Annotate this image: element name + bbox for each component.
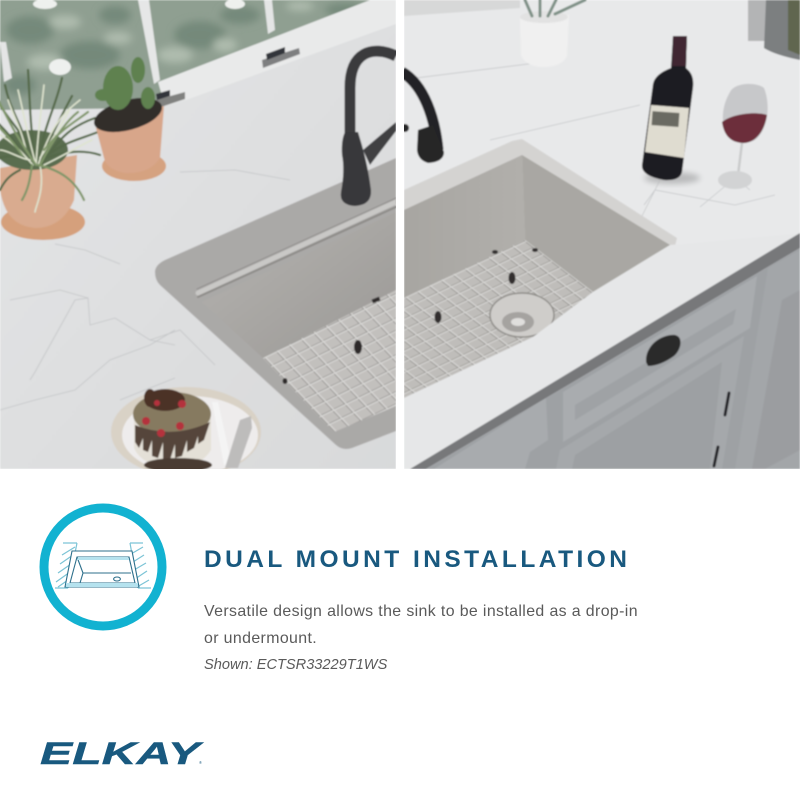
potted plant: large (0, 70, 100, 240)
sink rim (404, 139, 677, 246)
lower door (556, 336, 744, 469)
cake on plate with cutlery (111, 387, 261, 477)
cup drawer pull (646, 335, 681, 366)
white pot with plant (520, 0, 585, 67)
icon ring (44, 508, 162, 626)
window frame (158, 0, 396, 106)
door handles (714, 393, 729, 466)
wine glass (718, 84, 768, 189)
sink back wall (404, 155, 525, 298)
icon: dual mount sink in teal circle (40, 504, 166, 630)
description text (204, 603, 638, 673)
marble veins (0, 170, 290, 410)
sink bowl back wall (264, 258, 396, 356)
cabinets (426, 248, 800, 469)
drop-in sink flange (155, 158, 396, 449)
counter front covering sink (534, 244, 680, 336)
sink wire grid (263, 290, 396, 432)
panel: drop-in installation view (0, 0, 396, 477)
background appliance (748, 0, 800, 60)
panel: undermount installation view (400, 0, 800, 469)
upper drawer (563, 276, 757, 442)
window and foliage (0, 0, 396, 110)
logo: Elkay (40, 735, 205, 770)
countertop right (404, 0, 800, 244)
right door (735, 250, 800, 469)
photo: split kitchen sink scene (0, 0, 800, 469)
faucet (341, 51, 396, 206)
description text: Versatile design allows the sink to be installed as a drop-in (204, 603, 638, 620)
marble veins right (417, 64, 774, 216)
sink side wall (522, 155, 670, 292)
potted plant: small cactus (90, 57, 166, 181)
description text: Shown: ECTSR33229T1WS (204, 657, 387, 673)
sink ledge ridge (197, 198, 396, 297)
lower left drawer (434, 398, 548, 469)
heading: DUAL MOUNT INSTALLATION (204, 546, 630, 573)
icon counter hatching (55, 543, 151, 588)
countertop left (0, 0, 396, 469)
icon sink outline (65, 551, 139, 587)
window ledge (404, 0, 520, 16)
drain strainer (490, 293, 554, 337)
faucet right (401, 72, 444, 163)
counter edge band (410, 233, 800, 469)
wine bottle (642, 36, 700, 184)
grid posts (282, 297, 380, 384)
description text: or undermount. (204, 630, 317, 647)
grid posts right (434, 248, 538, 323)
sink floor grid (404, 240, 593, 398)
logo: Elkay: ® (199, 760, 202, 765)
logo: Elkay: ELKAY (40, 735, 205, 770)
